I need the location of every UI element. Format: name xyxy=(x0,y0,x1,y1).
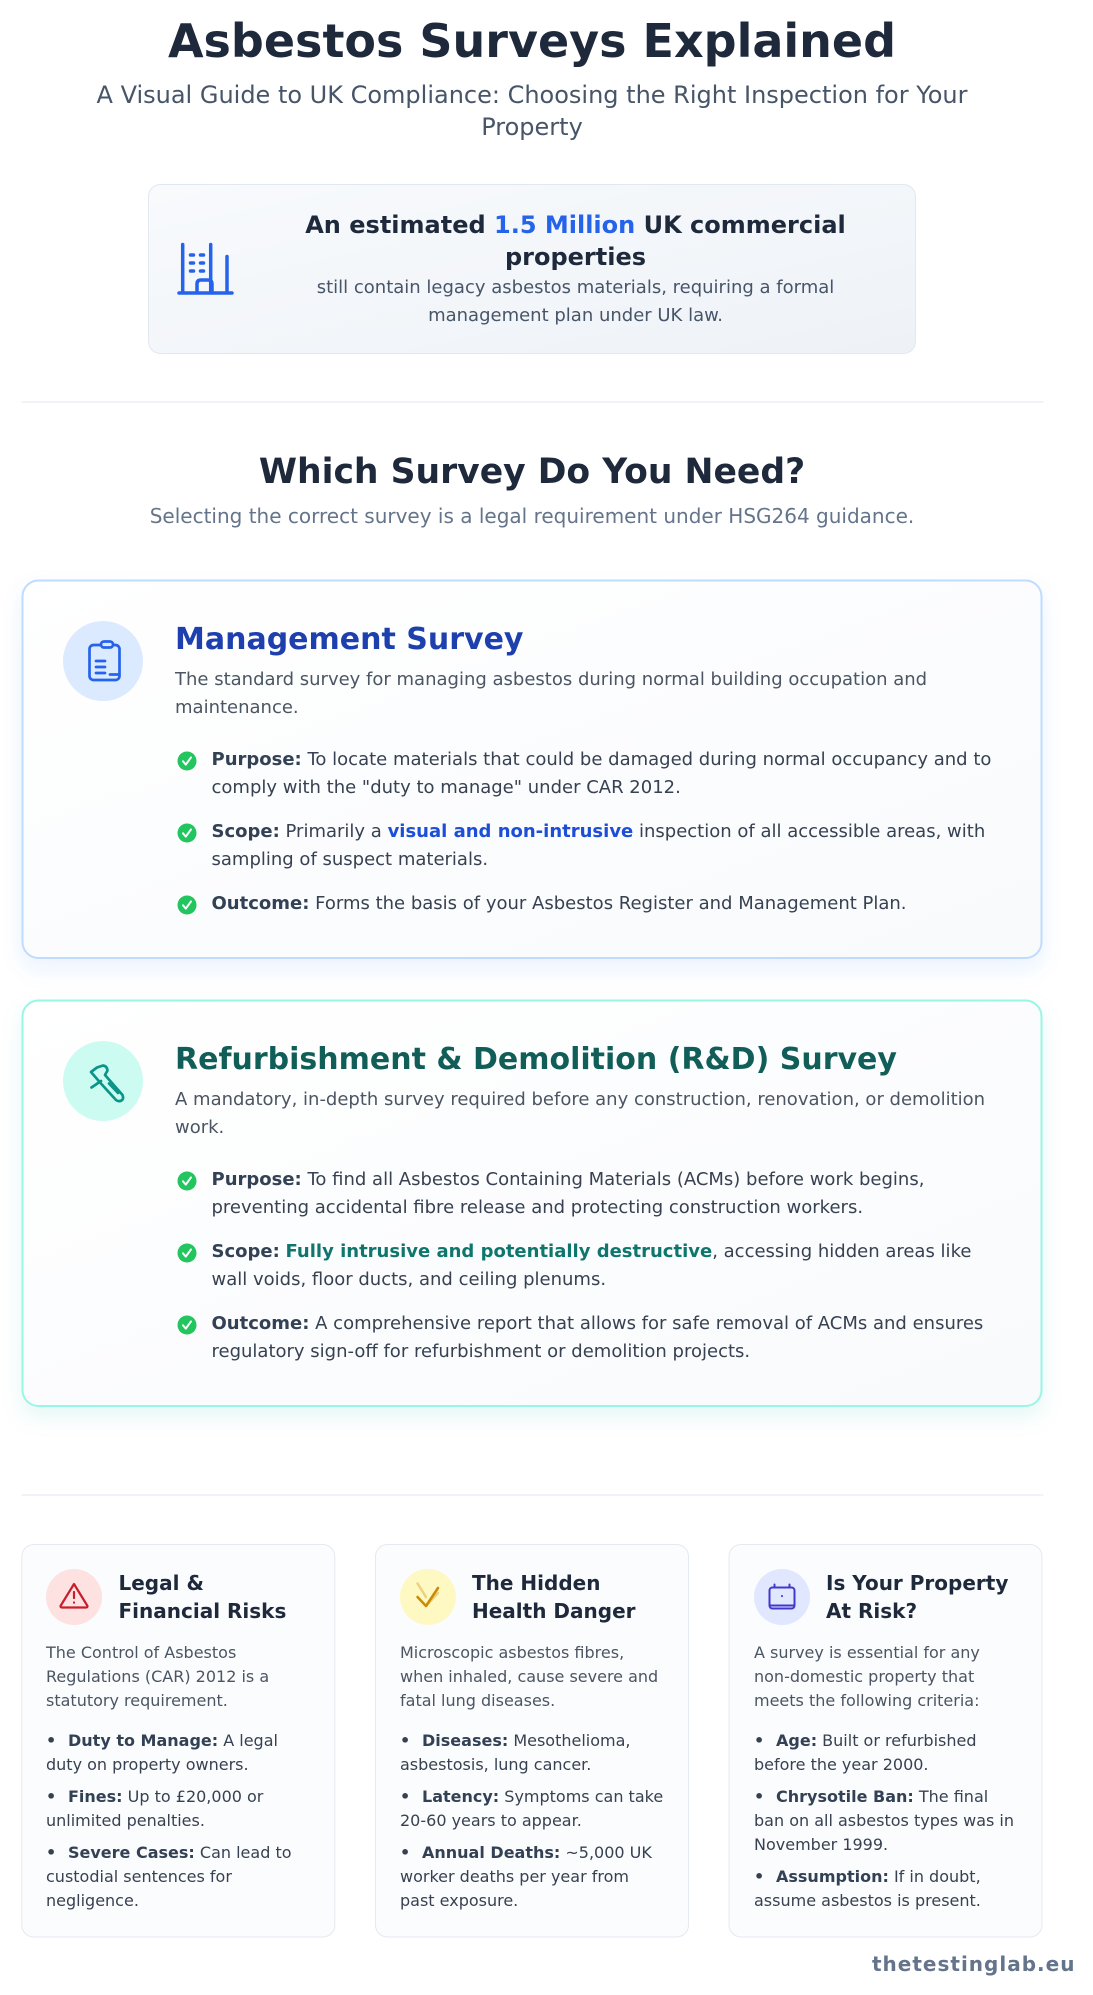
panel: key statistic xyxy=(148,184,916,354)
bullet list: Severe Cases: Can lead to xyxy=(68,1843,292,1862)
icon: building xyxy=(179,244,232,293)
list item: scope: Scope: Fully intrusive and potentially destructive, accessing hidden areas like xyxy=(212,1241,971,1262)
list item: outcome: regulatory sign-off for refurbishment or demolition projects. xyxy=(212,1341,750,1362)
panel: refurbishment and demolition survey xyxy=(22,1000,1042,1406)
card title: Health Danger xyxy=(472,1599,636,1623)
bullet list: Age: Built or refurbished xyxy=(776,1731,976,1750)
list item: purpose xyxy=(178,1169,924,1218)
bullet list: before the year 2000. xyxy=(754,1755,929,1774)
card description: fatal lung diseases. xyxy=(400,1691,555,1710)
statistic heading: An estimated 1.5 Million UK commercial xyxy=(305,211,846,239)
section heading: Which Survey Do You Need? xyxy=(259,452,805,492)
bullet list: negligence. xyxy=(46,1891,139,1910)
bullet list: asbestosis, lung cancer. xyxy=(400,1755,591,1774)
list item: outcome xyxy=(178,1313,983,1362)
card description xyxy=(45,1643,269,1710)
bullet list: 20-60 years to appear. xyxy=(400,1811,582,1830)
card title: The Hidden xyxy=(472,1571,600,1595)
divider xyxy=(22,402,1044,403)
list item: scope: sampling of suspect materials. xyxy=(212,849,488,870)
bullet list: • xyxy=(46,1843,56,1862)
subtitle: Property xyxy=(481,113,583,141)
bullet list: duty on property owners. xyxy=(46,1755,249,1774)
bullet list: • xyxy=(400,1731,410,1750)
card description: The standard survey for managing asbestos during normal building occupation and xyxy=(174,669,927,690)
bullet list: custodial sentences for xyxy=(46,1867,232,1886)
card description: when inhaled, cause severe and xyxy=(400,1667,658,1686)
statistic heading: properties xyxy=(505,243,646,271)
list item: scope xyxy=(178,1241,971,1290)
bullet list: • xyxy=(754,1731,764,1750)
panel: legal and financial risks xyxy=(22,1544,335,1937)
card description xyxy=(400,1643,658,1710)
card title xyxy=(472,1571,636,1623)
card description: Microscopic asbestos fibres, xyxy=(400,1643,624,1662)
bullet list xyxy=(46,1731,292,1910)
bullet list: unlimited penalties. xyxy=(46,1811,205,1830)
bullet list: • xyxy=(400,1843,410,1862)
bullet list: • xyxy=(46,1731,56,1750)
card description: A mandatory, in-depth survey required before any construction, renovation, or demolition xyxy=(175,1089,985,1110)
bullet list: Duty to Manage: A legal xyxy=(68,1731,278,1750)
list item: purpose: Purpose: To find all Asbestos Containing Materials (ACMs) before work begins, xyxy=(212,1169,924,1190)
statistic text: still contain legacy asbestos materials, requiring a formal xyxy=(317,277,834,298)
panel: management survey xyxy=(22,580,1042,958)
divider xyxy=(22,1494,1044,1496)
bullet list: November 1999. xyxy=(754,1835,888,1854)
icon: warning triangle xyxy=(46,1569,102,1625)
bullet list: Chrysotile Ban: The final xyxy=(776,1787,988,1806)
list item: purpose xyxy=(178,749,991,798)
bullet list: • xyxy=(400,1787,410,1806)
watermark: thetestinglab.eu xyxy=(872,1952,1075,1976)
bullet list: past exposure. xyxy=(400,1891,518,1910)
section subheading: Selecting the correct survey is a legal requirement under HSG264 guidance. xyxy=(150,504,914,528)
card title: Is Your Property xyxy=(826,1571,1008,1595)
bullet list: Latency: Symptoms can take xyxy=(422,1787,663,1806)
statistic text: management plan under UK law. xyxy=(428,305,723,326)
list item: purpose: Purpose: To locate materials that could be damaged during normal occupancy and to xyxy=(212,749,991,770)
card description xyxy=(175,1089,985,1138)
panel: is your property at risk xyxy=(729,1544,1042,1937)
icon: fibres xyxy=(400,1569,456,1625)
card description: Regulations (CAR) 2012 is a xyxy=(46,1667,269,1686)
card description: non-domestic property that xyxy=(754,1667,974,1686)
bullet list: • xyxy=(46,1787,56,1806)
icon: calendar xyxy=(754,1569,810,1625)
list item: outcome: Outcome: A comprehensive report that allows for safe removal of ACMs and ensures xyxy=(212,1313,983,1334)
bullet list: ban on all asbestos types was in xyxy=(754,1811,1014,1830)
card description: The Control of Asbestos xyxy=(45,1643,236,1662)
bullet list: Annual Deaths: ~5,000 UK xyxy=(422,1843,652,1862)
card title: Management Survey xyxy=(175,622,524,657)
list item: scope: wall voids, floor ducts, and ceiling plenums. xyxy=(212,1269,606,1290)
statistic heading xyxy=(305,211,846,271)
bullet list: assume asbestos is present. xyxy=(754,1891,981,1910)
subtitle: A Visual Guide to UK Compliance: Choosing the Right Inspection for Your xyxy=(97,81,968,109)
card title xyxy=(118,1571,286,1623)
card description: maintenance. xyxy=(175,697,299,718)
card title xyxy=(826,1571,1008,1623)
card description: A survey is essential for any xyxy=(754,1643,980,1662)
subtitle xyxy=(97,81,968,141)
title: Asbestos Surveys Explained xyxy=(168,14,896,68)
bullet list: Assumption: If in doubt, xyxy=(776,1867,981,1886)
list item: purpose: preventing accidental fibre release and protecting construction workers. xyxy=(212,1197,863,1218)
card description: statutory requirement. xyxy=(46,1691,228,1710)
card description xyxy=(754,1643,980,1710)
card description: work. xyxy=(175,1117,224,1138)
icon: clipboard xyxy=(63,621,143,701)
card description xyxy=(174,669,927,718)
bullet list: Fines: Up to £20,000 or xyxy=(68,1787,264,1806)
card title: Legal & xyxy=(118,1571,204,1595)
list item: scope xyxy=(178,821,985,870)
list item: purpose: comply with the "duty to manage" under CAR 2012. xyxy=(212,777,681,798)
card description: meets the following criteria: xyxy=(754,1691,979,1710)
bullet list: Diseases: Mesothelioma, xyxy=(422,1731,631,1750)
icon: wrench xyxy=(63,1041,143,1121)
card title: Financial Risks xyxy=(118,1599,286,1623)
list item: scope: Scope: Primarily a visual and non-intrusive inspection of all accessible areas, with xyxy=(212,821,985,842)
bullet list xyxy=(400,1731,663,1910)
bullet list: • xyxy=(754,1787,764,1806)
bullet list: worker deaths per year from xyxy=(400,1867,629,1886)
card title: At Risk? xyxy=(826,1599,917,1623)
panel: hidden health danger xyxy=(376,1544,688,1937)
card title: Refurbishment & Demolition (R&D) Survey xyxy=(175,1042,897,1077)
bullet list xyxy=(754,1731,1014,1910)
bullet list: • xyxy=(754,1867,764,1886)
list item: outcome: Outcome: Forms the basis of your Asbestos Register and Management Plan. xyxy=(212,893,907,914)
statistic text xyxy=(317,277,834,326)
